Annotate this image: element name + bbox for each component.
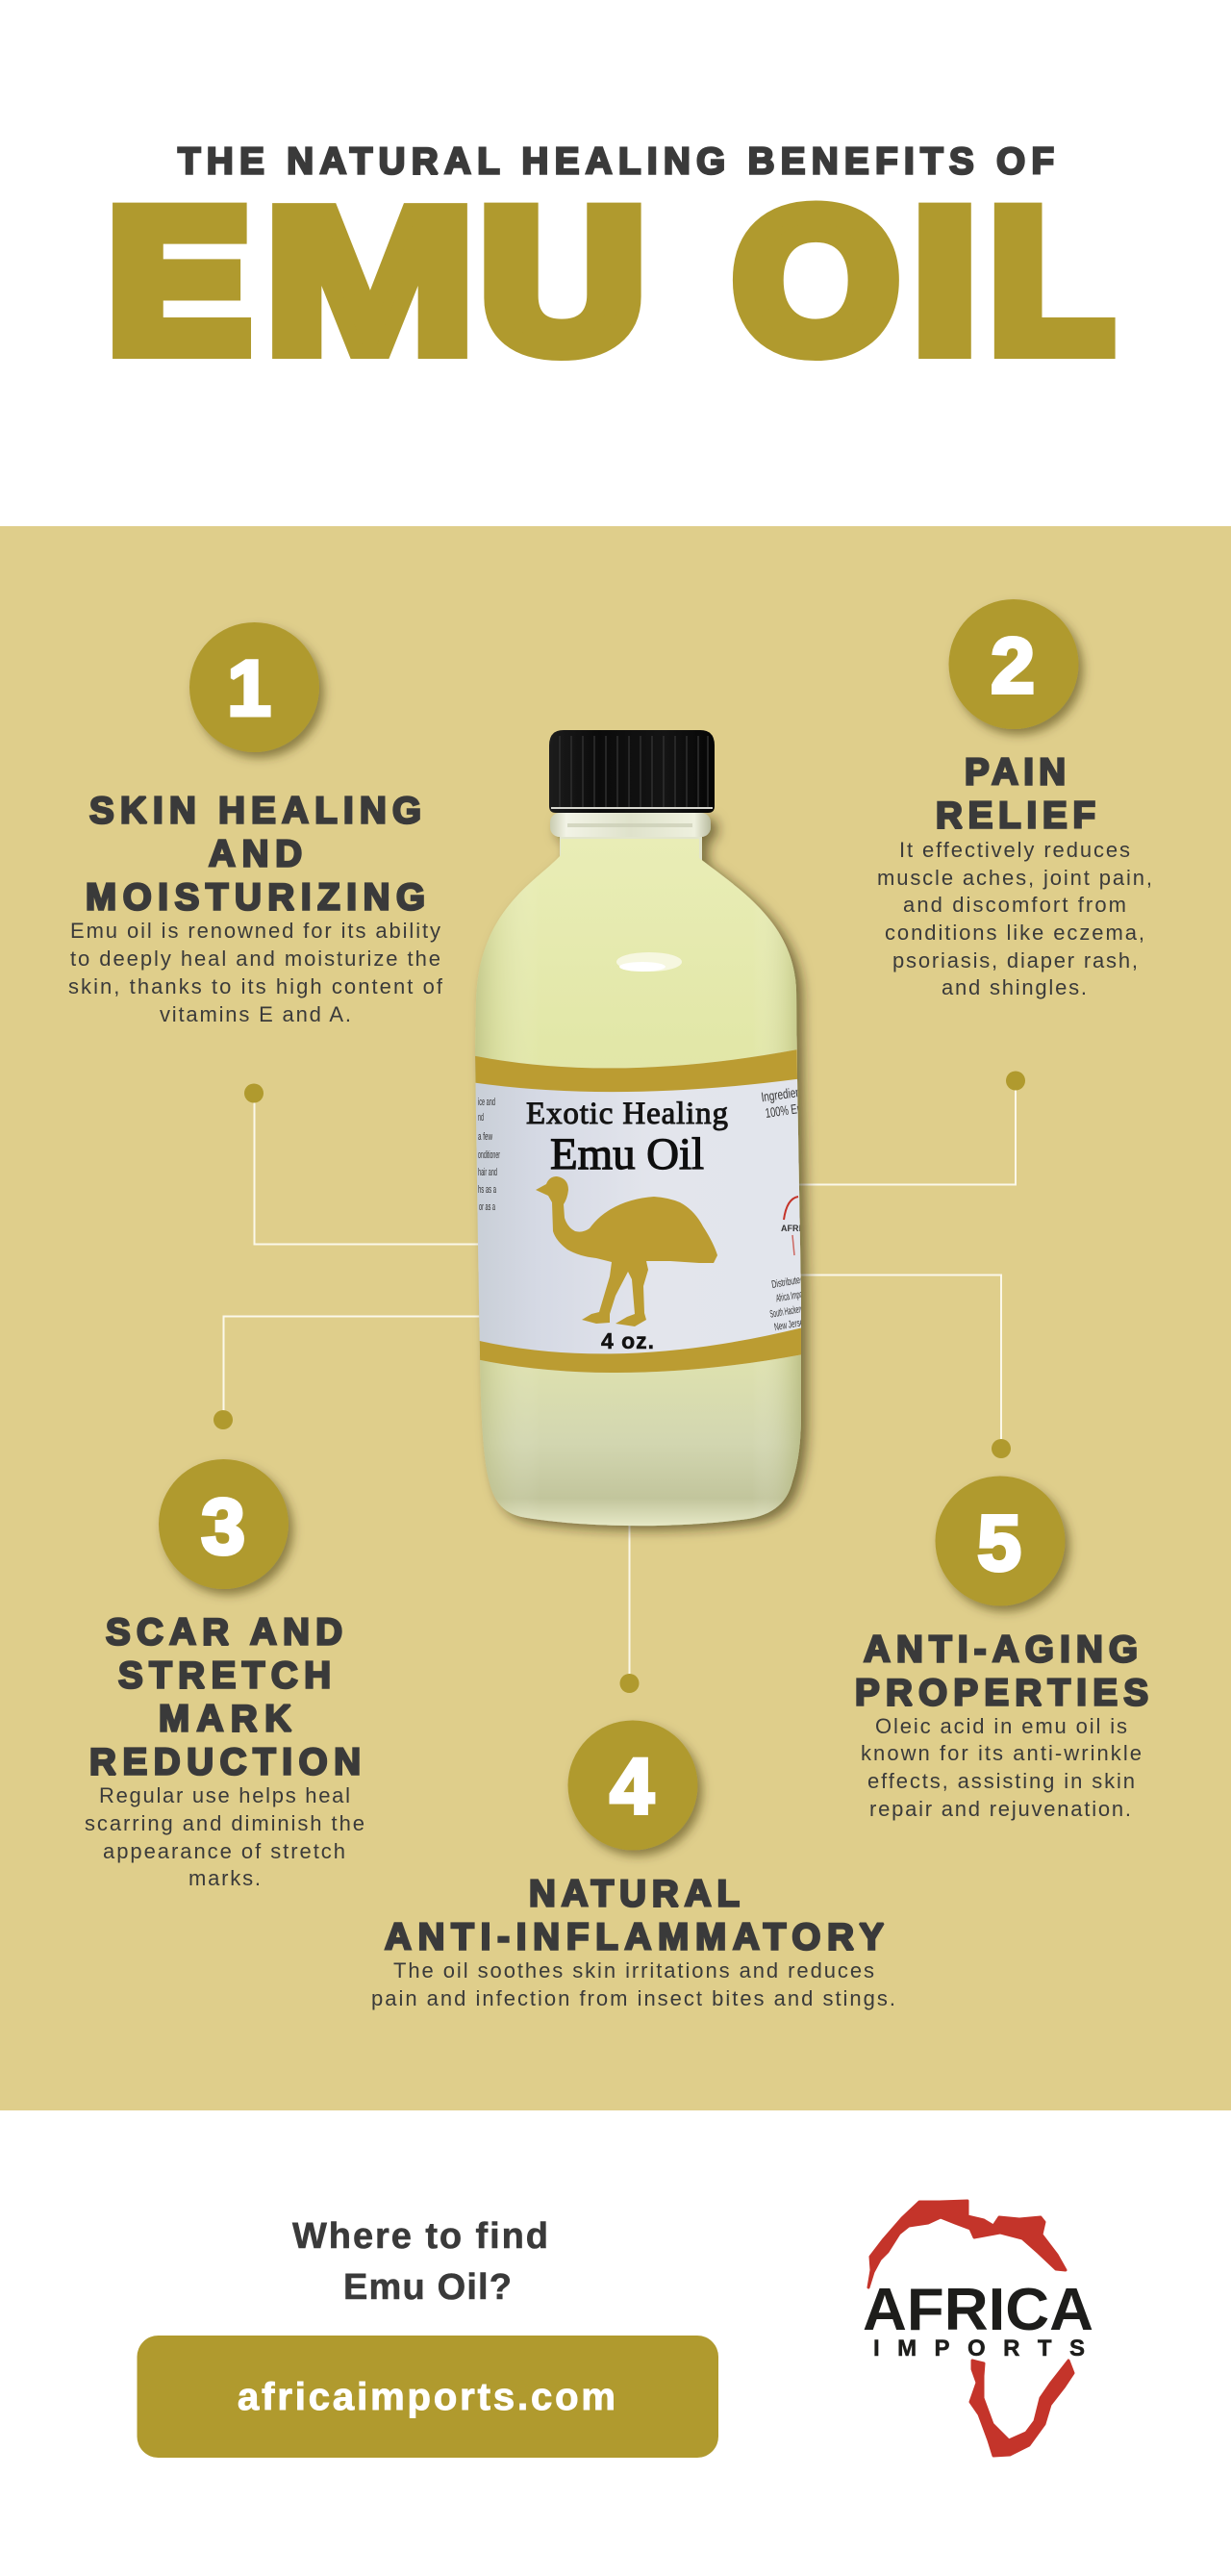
title: EMU OIL: L (991, 169, 1112, 391)
body 3 (85, 1783, 364, 1890)
label: distributor text: Africa Imports (775, 1288, 810, 1304)
label: Emu Oil: Emu Oil (550, 1129, 704, 1179)
label: emu silhouette (536, 1176, 717, 1326)
body 1 (68, 919, 443, 1026)
call-to-action button (137, 2336, 718, 2458)
label: left side text: hs as a (478, 1184, 496, 1196)
bottle of emu oil (471, 730, 816, 1526)
body 2: and discomfort from (903, 893, 1126, 917)
body 4 (371, 1958, 895, 2010)
title: EMU OIL: M (264, 164, 476, 396)
body 2: psoriasis, diaper rash, (892, 948, 1138, 972)
footer question: Where to find (292, 2216, 548, 2257)
body 1: skin, thanks to its high content of (68, 974, 443, 998)
label: distributor text: Distributed (770, 1274, 805, 1291)
label: 4 oz.: 4 oz. (601, 1328, 654, 1353)
heading 4: NATURAL (529, 1874, 740, 1914)
body 2: and shingles. (942, 975, 1087, 999)
label: left side text (478, 1097, 500, 1213)
badge 4: 4 (610, 1743, 654, 1831)
body 5 (861, 1714, 1142, 1821)
body 2: conditions like eczema, (885, 921, 1144, 945)
badge 3 (159, 1459, 289, 1589)
benefit 1: skin healing (68, 622, 443, 1026)
label: left side text: a few (478, 1131, 492, 1143)
logo: red Africa outline (868, 2201, 1073, 2456)
heading 2: RELIEF (936, 795, 1095, 837)
bottle: black cap (549, 730, 715, 813)
label: distributor text: New Jersey (773, 1316, 808, 1333)
label: distributor text (769, 1277, 801, 1331)
benefit 3: scar and stretch mark reduction (85, 1459, 364, 1890)
label: left side text: hair and (478, 1167, 497, 1178)
title: EMU OIL: O (735, 169, 898, 391)
heading 3: STRETCH (118, 1654, 331, 1697)
heading 5: PROPERTIES (855, 1672, 1148, 1714)
body 5: known for its anti-wrinkle (861, 1741, 1142, 1765)
heading 5 (855, 1629, 1148, 1714)
body 5: effects, assisting in skin (867, 1769, 1135, 1793)
body 2: muscle aches, joint pain, (877, 866, 1152, 890)
label: left side text: or as a (479, 1201, 495, 1213)
body 2 (877, 838, 1152, 999)
heading 1: SKIN HEALING (89, 791, 421, 831)
badge 5: 5 (977, 1500, 1021, 1587)
title: EMU OIL: U (482, 169, 644, 391)
body 5: Oleic acid in emu oil is (875, 1714, 1127, 1738)
label: ingredients text (762, 1088, 798, 1118)
label: ingredients text: 100% Emu (765, 1099, 811, 1121)
heading 1: MOISTURIZING (86, 877, 425, 918)
heading 3: MARK (159, 1699, 291, 1739)
label: left side text: nd (478, 1112, 484, 1124)
call-to-action button: africaimports.com (238, 2376, 616, 2418)
benefit 4: natural anti-inflammatory (371, 1720, 895, 2010)
label: distributor text: South Hackensack (769, 1301, 813, 1321)
body 1: vitamins E and A. (160, 1002, 351, 1026)
bottle: label: onditioner (478, 1149, 500, 1161)
benefit 5: anti-aging properties (855, 1476, 1148, 1821)
heading 3: SCAR AND (106, 1612, 342, 1653)
badge 2: 2 (991, 622, 1035, 710)
label: small logo (781, 1196, 800, 1256)
logo: IMPORTS wordmark: IMPORTS (873, 2336, 1085, 2361)
badge 3: 3 (201, 1483, 245, 1571)
footer question: Emu Oil? (343, 2267, 512, 2308)
bottle: glass neck (550, 813, 711, 868)
body 2: It effectively reduces (899, 838, 1130, 862)
heading 4 (385, 1874, 884, 1958)
body 3: Regular use helps heal (99, 1783, 350, 1807)
heading 4: ANTI-INFLAMMATORY (385, 1916, 884, 1958)
heading 5: ANTI-AGING (864, 1629, 1138, 1670)
heading 3 (89, 1612, 361, 1783)
label: small logo: AFRICA (781, 1224, 814, 1233)
heading 3: REDUCTION (89, 1741, 361, 1783)
logo: Africa Imports (863, 2201, 1093, 2456)
title: subtitle line: THE NATURAL HEALING BENEFITS OF (178, 140, 1054, 183)
connector lines (223, 1090, 1016, 1674)
body 3: scarring and diminish the (85, 1811, 364, 1835)
logo: AFRICA wordmark: AFRICA (863, 2277, 1093, 2343)
badge 5 (935, 1476, 1066, 1606)
body 4: pain and infection from insect bites and stings. (371, 1986, 895, 2010)
badge 1: 1 (227, 644, 271, 733)
connector dots (214, 1072, 1025, 1693)
bottle: label (471, 1048, 816, 1373)
body 1: Emu oil is renowned for its ability (70, 919, 440, 943)
body 4: The oil soothes skin irritations and reduces (393, 1958, 874, 1983)
body 3: marks. (188, 1866, 261, 1890)
badge 1 (189, 622, 319, 752)
bottle: glass body with oil (475, 839, 801, 1526)
title: EMU OIL: I (915, 169, 975, 391)
title: EMU OIL: E (109, 169, 249, 391)
footer question (292, 2216, 548, 2308)
label: left side text: ice and (478, 1097, 495, 1108)
heading 1 (86, 791, 425, 918)
title (109, 140, 1112, 396)
heading 2: PAIN (965, 752, 1066, 793)
body 5: repair and rejuvenation. (869, 1797, 1131, 1821)
label: ingredients text: Ingredients: (760, 1082, 812, 1104)
panel: benefits background (0, 526, 1231, 2110)
heading 2 (936, 752, 1095, 837)
badge 4 (567, 1720, 698, 1851)
label: Exotic Healing: Exotic Healing (526, 1097, 728, 1131)
body 3: appearance of stretch (103, 1839, 345, 1863)
body 1: to deeply heal and moisturize the (70, 947, 440, 971)
badge 2 (948, 599, 1079, 729)
benefit 2: pain relief (877, 599, 1152, 999)
heading 1: AND (209, 833, 302, 875)
